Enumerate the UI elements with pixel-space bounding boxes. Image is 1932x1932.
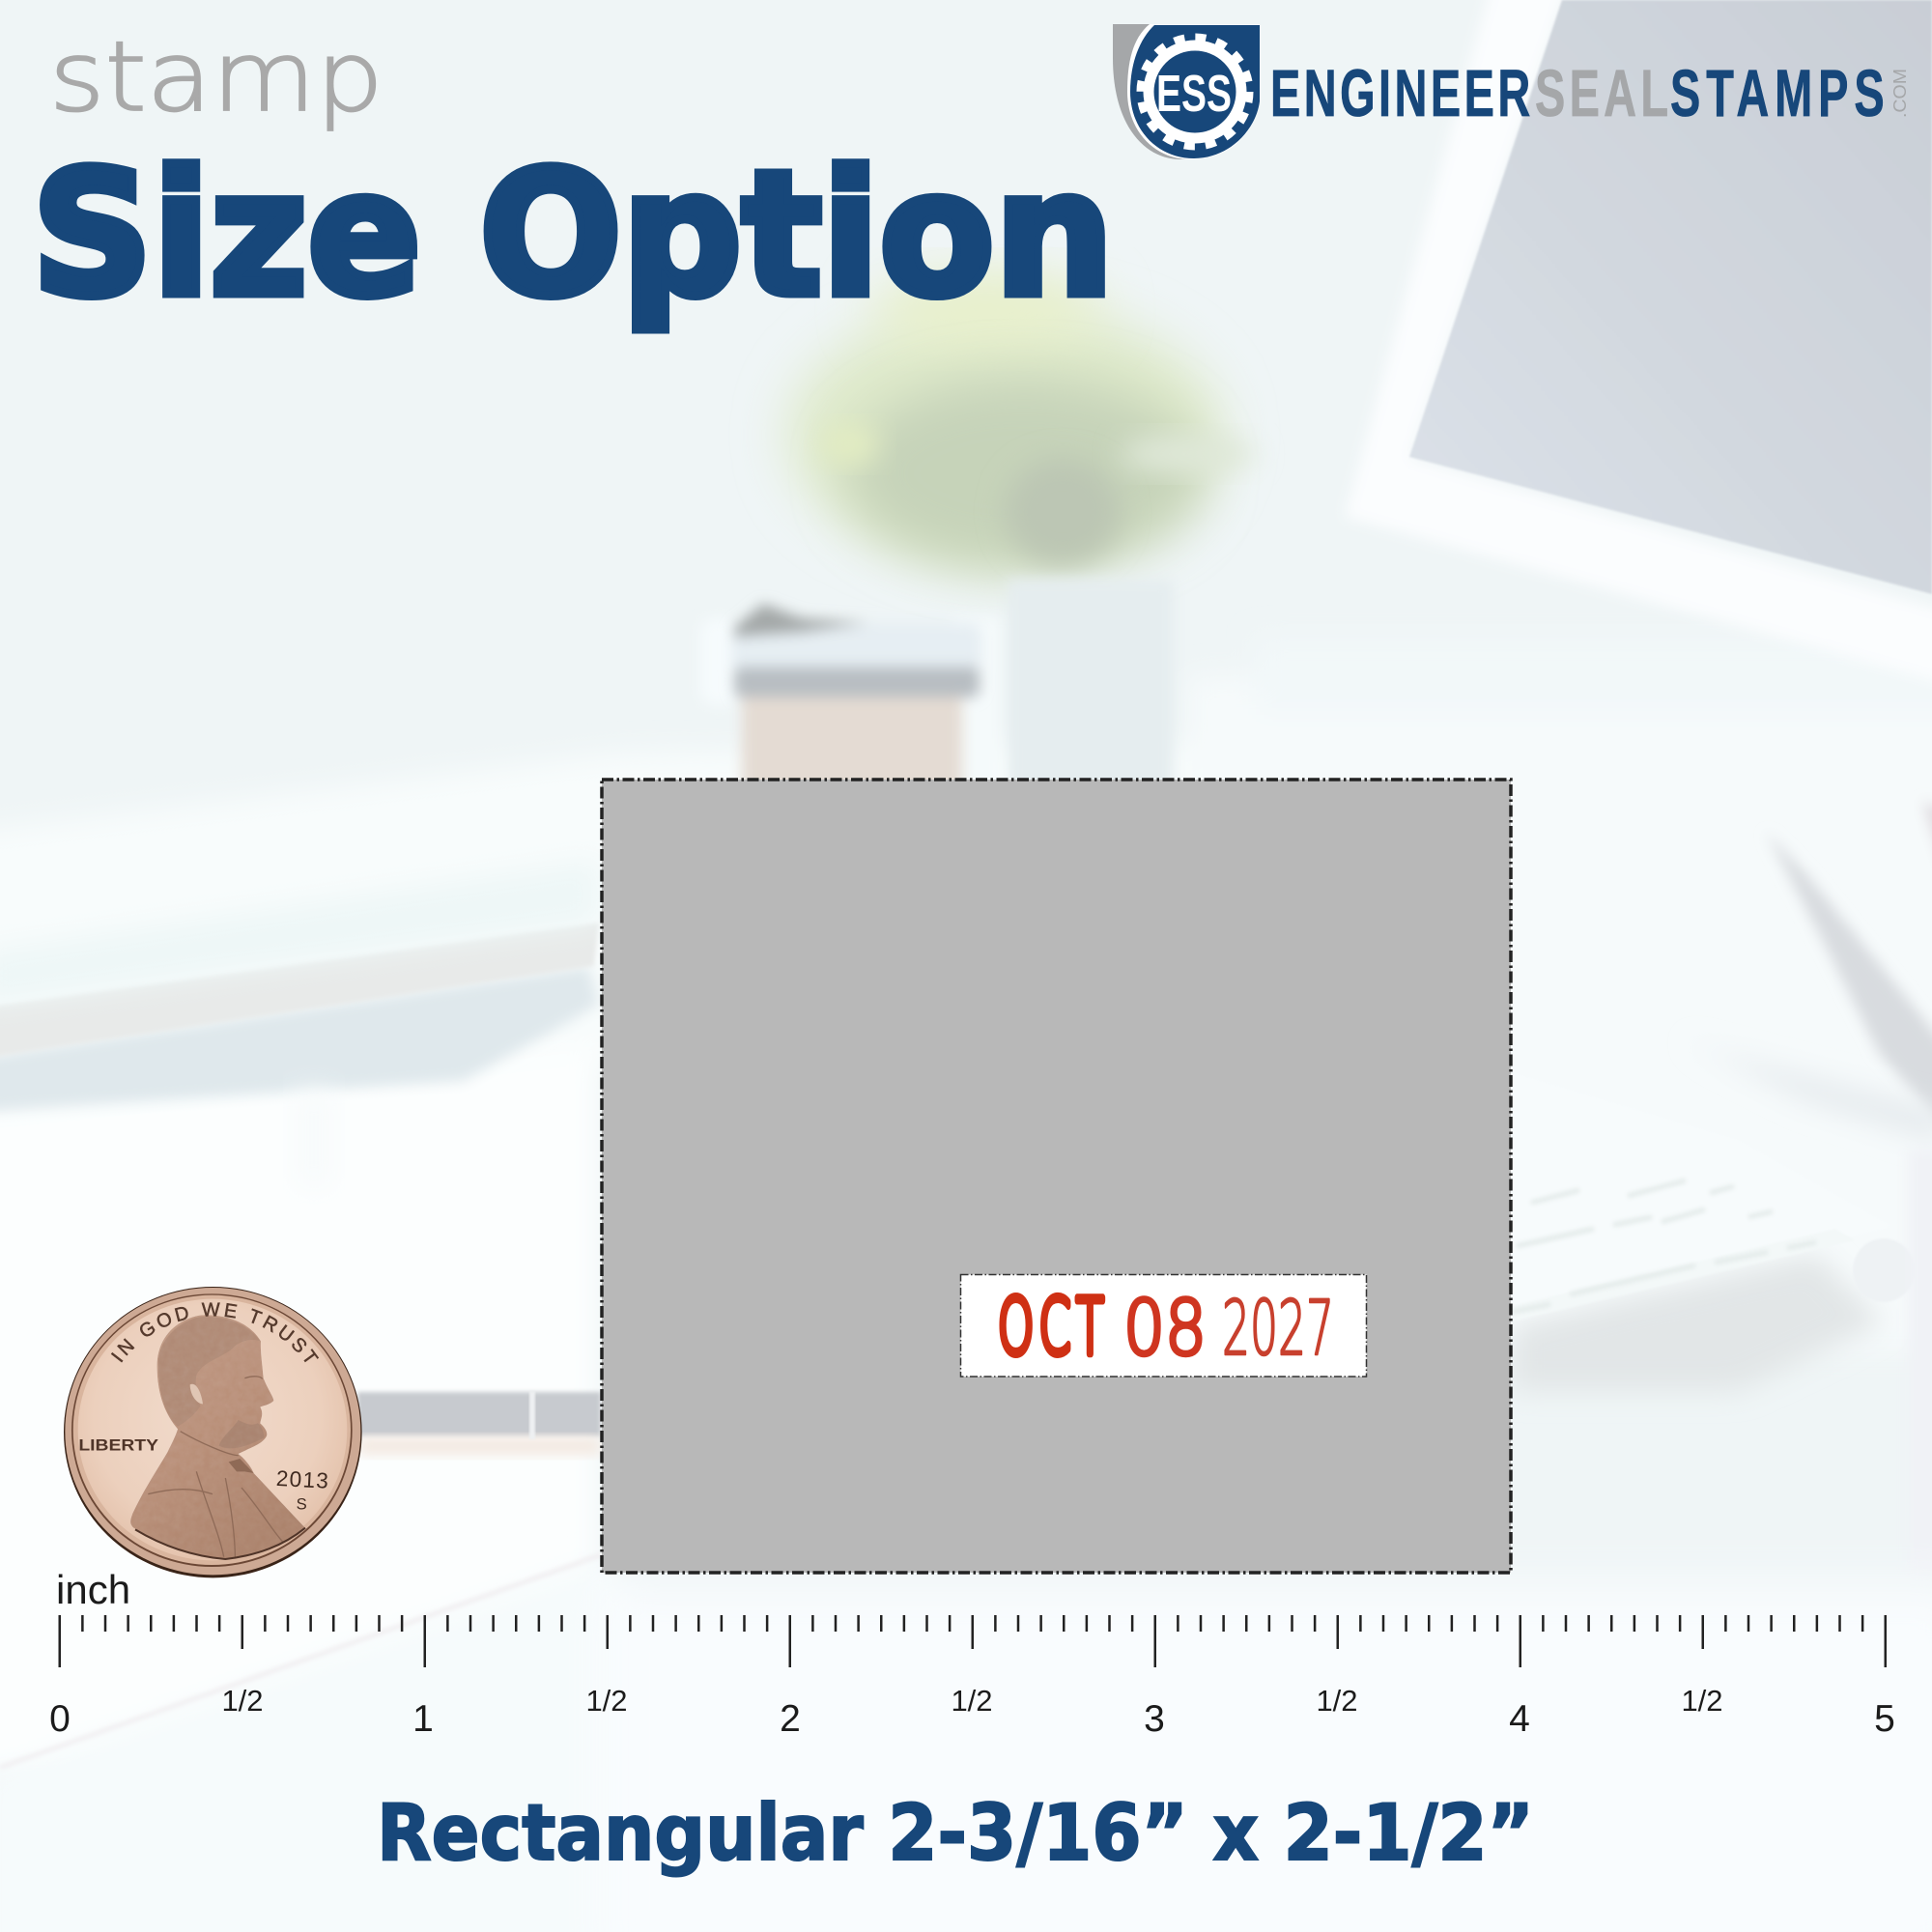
monitor bezel [1345,0,1932,691]
blurred book and pen on left [0,860,599,1188]
bust of Lincoln [130,1315,305,1559]
blurred object at right edge [1908,1150,1932,1575]
heading: Size Option: Size Option [32,134,1114,334]
ruler ticks [58,1623,1889,1641]
wordmark: .COM: .COM [1890,69,1910,118]
blurred pen behind coin [357,1391,601,1455]
icon: ESS gear badge [1113,24,1260,159]
keyboard [1512,1072,1915,1391]
ruler half-inch labels: 1/2 [1316,1684,1358,1718]
ruler inch numbers [49,1698,1895,1740]
coin text: 2013: 2013 [275,1465,329,1493]
blurred vase [1008,580,1174,802]
blurred plant [787,270,1256,570]
date year: 2027: 2027 [1222,1286,1334,1373]
date month: OCT: OCT [998,1284,1104,1372]
small title: stamp: stamp [49,20,384,133]
ruler inch numbers: 4 [1509,1698,1530,1740]
ruler inch numbers: 0 [49,1698,71,1740]
ruler half-inch labels: 1/2 [585,1684,628,1718]
stamp impression area [602,780,1511,1573]
ruler inch numbers: 3 [1144,1698,1165,1740]
ruler half-inch labels: 1/2 [1681,1684,1723,1718]
date day: 08: 08 [1123,1286,1207,1373]
ruler half-inch labels: 1/2 [951,1684,993,1718]
ruler unit label: inch [56,1567,130,1612]
ruler inch numbers: 1 [412,1698,434,1740]
logo: Engineer Seal Stamps [1113,24,1910,159]
wordmark: STAMPS: STAMPS [1670,56,1885,130]
coin text: LIBERTY: LIBERTY [78,1436,158,1455]
desk edge line [0,1555,601,1768]
ruler inch numbers: 5 [1874,1698,1895,1740]
wordmark: SEAL: SEAL [1535,56,1668,130]
ruler inch numbers: 2 [780,1698,801,1740]
ruler half-inch labels [221,1684,1723,1718]
ruler half-inch labels: 1/2 [221,1684,264,1718]
wordmark: ENGINEER: ENGINEER [1270,56,1530,130]
penny comparison coin [64,1287,362,1578]
coin mint mark: S [297,1495,307,1514]
icon: ESS gear badge: ESS [1156,65,1232,123]
size caption: Rectangular 2-3/16” x 2-1/2” [377,1788,1534,1878]
blurred pencil and shadow [1684,802,1932,1145]
monitor screen [1409,0,1932,594]
blurred coffee cup [700,604,1000,804]
date stamp label [960,1275,1366,1377]
penny comparison coin: IN GOD WE TRUST [110,1302,319,1362]
ruler [49,1567,1895,1740]
coin motto [121,1316,311,1370]
